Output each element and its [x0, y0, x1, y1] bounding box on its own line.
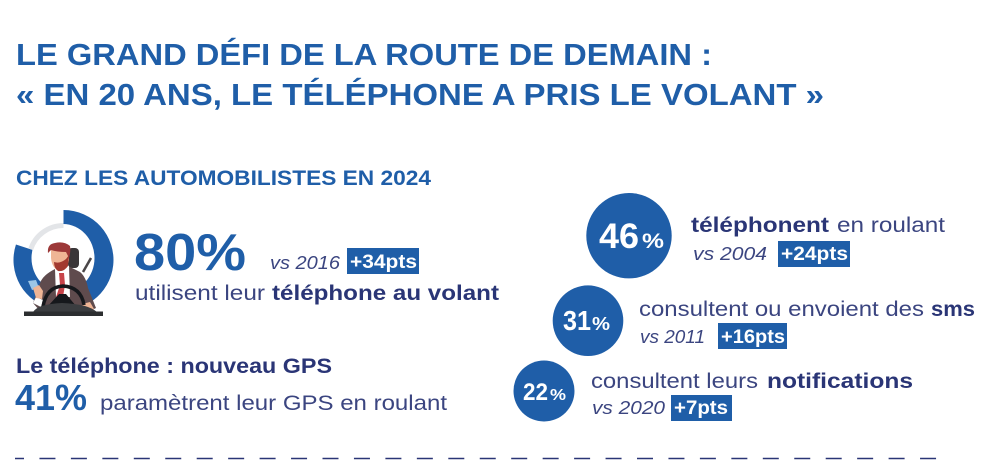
- stat circle: 46%: [586, 193, 672, 278]
- text: téléphonent en roulant: [691, 214, 945, 237]
- icon part: face: [51, 249, 69, 271]
- text: consultent leurs notifications: [591, 370, 913, 393]
- text: utilisent leur téléphone au volant: utilisent leur: [135, 282, 265, 305]
- icon part: left hand: [33, 285, 43, 299]
- text: utilisent leur téléphone au volant: [135, 282, 499, 305]
- icon part: tie: [56, 273, 65, 297]
- text: consultent leurs notifications: notifications: [767, 370, 913, 393]
- title: [16, 37, 824, 112]
- icon part: beard: [54, 255, 69, 271]
- icon part: headrest: [68, 248, 79, 268]
- title: LE GRAND DÉFI DE LA ROUTE DE DEMAIN :: [16, 37, 712, 72]
- stat circle: 46%: %: [642, 230, 664, 253]
- icon: driver using a phone at the wheel: [24, 242, 103, 316]
- stat circle: 22%: [514, 360, 574, 422]
- text: consultent ou envoient des sms: sms: [931, 298, 975, 321]
- heading: chez les automobilistes: CHEZ LES AUTOMOBILISTES EN 2024: [16, 166, 431, 190]
- stat: 41%: 41%: [15, 377, 87, 418]
- icon part: steering wheel: [43, 286, 84, 307]
- text: consultent leurs notifications: consultent leurs: [591, 370, 758, 393]
- stat circle: 31%: 31: [563, 305, 591, 336]
- text: consultent ou envoient des sms: consultent ou envoient des: [639, 298, 924, 321]
- icon part: hair: [48, 242, 70, 258]
- text: utilisent leur téléphone au volant: téléphone au volant: [272, 282, 499, 305]
- stat circle: 46%: 46: [599, 217, 639, 256]
- text: téléphonent en roulant: en roulant: [837, 214, 945, 237]
- badge: +34pts: +34pts: [350, 251, 417, 273]
- badge: +24pts: +24pts: [781, 243, 848, 265]
- icon part: phone: [28, 280, 39, 290]
- text: téléphonent en roulant: téléphonent: [691, 214, 829, 237]
- comparison: vs 2004: vs 2004: [693, 244, 767, 264]
- icon part: cuff: [33, 297, 43, 307]
- comparison: vs 2020: vs 2020: [592, 398, 665, 418]
- stat circle: 31%: [553, 285, 623, 356]
- comparison: vs 2016: vs 2016: [270, 253, 341, 273]
- stat circle: 22%: %: [550, 387, 566, 404]
- stat circle: 22%: 22: [523, 379, 548, 406]
- icon part: right hand: [82, 302, 94, 312]
- stat circle: 31%: %: [592, 314, 610, 334]
- title: « EN 20 ANS, LE TÉLÉPHONE A PRIS LE VOLANT »: [16, 77, 824, 112]
- icon part: torso and arms: [33, 267, 96, 311]
- comparison: vs 2011: vs 2011: [640, 327, 705, 347]
- badge: +16pts: +16pts: [721, 326, 785, 348]
- icon part: seat belt: [83, 258, 91, 272]
- subheading: le téléphone nouveau GPS: Le téléphone : nouveau GPS: [16, 355, 332, 378]
- donut chart: 80%: [13, 210, 113, 310]
- icon part: shirt: [55, 266, 70, 297]
- badge: +7pts: +7pts: [674, 397, 728, 419]
- text: paramètrent leur GPS: paramètrent leur GPS en roulant: [100, 392, 447, 415]
- stat: 80%: 80%: [134, 224, 246, 282]
- icon part: dashboard: [33, 303, 97, 312]
